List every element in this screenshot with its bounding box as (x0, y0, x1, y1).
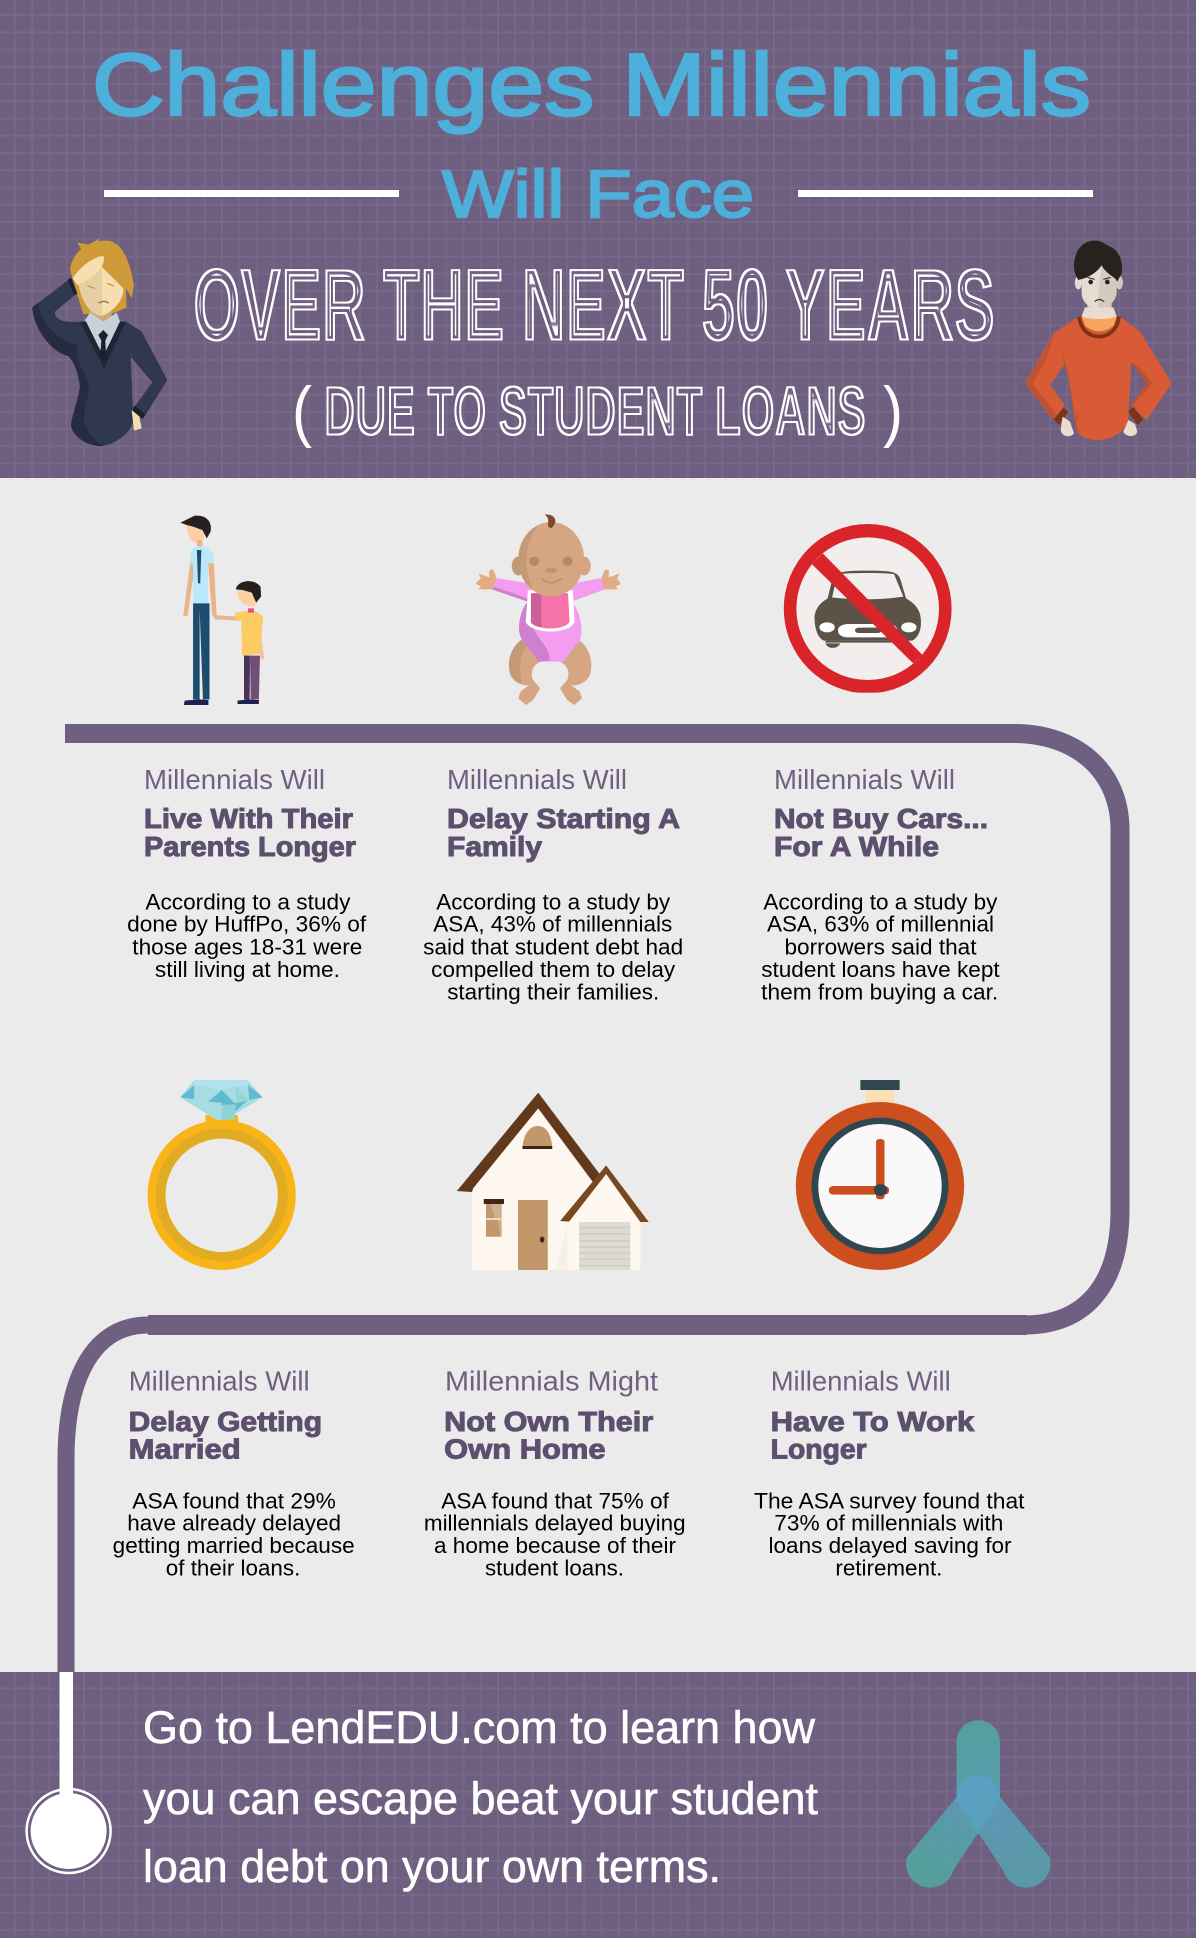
body text: According to a study by (763, 889, 998, 914)
baby bib (528, 592, 572, 630)
icon: diamond ring (148, 1080, 296, 1270)
panel: live with parents (127, 764, 367, 982)
baby legs (509, 639, 591, 705)
left rule (104, 190, 399, 197)
baby hands (476, 569, 496, 589)
body text (423, 889, 683, 1004)
body text (113, 1488, 355, 1580)
body text: According to a study by (436, 889, 671, 914)
body text: getting married because (113, 1533, 355, 1558)
heading (447, 803, 680, 862)
heading: Live With Their (144, 803, 353, 834)
label: Millennials Will (447, 764, 627, 795)
call to action text (143, 1702, 818, 1892)
body text: still living at home. (155, 957, 340, 982)
icon: LendEDU logo (906, 1720, 1050, 1888)
icon: father and son (180, 516, 264, 705)
body text: millennials delayed buying (424, 1511, 686, 1536)
call to action text: you can escape beat your student (143, 1773, 818, 1824)
heading: due to student loans (292, 372, 903, 450)
body text (127, 889, 367, 982)
baby ears and head (512, 557, 525, 575)
body text: said that student debt had (423, 934, 683, 960)
right rule (798, 190, 1093, 197)
heading: Not Own Their (444, 1406, 653, 1437)
body text: student loans. (485, 1556, 624, 1580)
body text: retirement. (835, 1556, 942, 1580)
icon: stressed woman in suit (32, 238, 167, 446)
icon: baby (476, 515, 621, 705)
panel: delay getting married (113, 1366, 355, 1580)
body text (754, 1488, 1025, 1580)
body text: compelled them to delay (431, 957, 676, 982)
heading: Have To Work (771, 1406, 975, 1437)
heading: Longer (771, 1433, 867, 1464)
heading (771, 1406, 975, 1464)
icon: house (457, 1093, 649, 1270)
body text: student loans have kept (761, 957, 1000, 982)
progress path line (65, 734, 1120, 1672)
body text: The ASA survey found that (754, 1488, 1025, 1513)
body text: done by HuffPo, 36% of (127, 912, 367, 937)
heading: Delay Starting A (447, 803, 680, 834)
subtitle: Will Face: Will Face (442, 157, 754, 232)
panel: work longer (754, 1366, 1025, 1580)
heading: Married (129, 1433, 241, 1464)
heading: For A While (774, 831, 939, 862)
icon: frustrated man in orange sweater (1025, 241, 1172, 440)
call to action text: Go to LendEDU.com to learn how (143, 1702, 815, 1753)
heading: Own Home (444, 1433, 606, 1464)
body text: ASA found that 29% (132, 1488, 336, 1513)
car (814, 571, 921, 641)
call to action text: loan debt on your own terms. (143, 1841, 721, 1892)
title: Challenges Millennials: Challenges Millennials (92, 35, 1091, 134)
body text: those ages 18-31 were (132, 934, 362, 960)
heading: Parents Longer (144, 831, 356, 862)
body text (761, 889, 1000, 1004)
body text: According to a study (145, 889, 351, 914)
body text: ASA found that 75% of (441, 1488, 670, 1513)
heading (129, 1406, 322, 1464)
panel: header (0, 0, 1196, 478)
label: Millennials Will (774, 764, 955, 795)
path end marker (27, 1672, 111, 1873)
heading: Family (447, 831, 542, 862)
body text: a home because of their (434, 1533, 677, 1558)
heading: due to student loans: ( (292, 373, 312, 449)
body text (424, 1488, 686, 1580)
body text: starting their families. (447, 980, 659, 1004)
heading (444, 1406, 653, 1464)
icon: stopwatch clock (796, 1080, 964, 1270)
label: Millennials Will (129, 1366, 310, 1397)
panel: not own home (424, 1366, 686, 1580)
label: Millennials Will (771, 1366, 951, 1397)
body text: ASA, 63% of millennial (767, 912, 994, 937)
heading (144, 803, 356, 862)
label: Millennials Will (144, 764, 325, 795)
baby onesie (492, 578, 605, 662)
body text: 73% of millennials with (774, 1511, 1003, 1536)
body text: borrowers said that (784, 934, 977, 960)
heading: Not Buy Cars... (774, 803, 988, 834)
panel: delay starting a family (423, 764, 683, 1004)
label: Millennials Might (445, 1366, 658, 1397)
heading: due to student loans: DUE TO STUDENT LOANS (324, 372, 866, 450)
panel: footer call to action (0, 1672, 1196, 1938)
body text: ASA, 43% of millennials (433, 912, 672, 937)
body text: have already delayed (127, 1511, 341, 1536)
heading (774, 803, 988, 862)
panel: not buy cars (761, 764, 1000, 1004)
icon: no cars sign (777, 524, 958, 695)
heading: due to student loans: ) (883, 373, 903, 449)
heading: Delay Getting (129, 1406, 322, 1437)
body text: of their loans. (166, 1556, 300, 1580)
body text: loans delayed saving for (768, 1533, 1012, 1558)
body text: them from buying a car. (761, 980, 998, 1004)
